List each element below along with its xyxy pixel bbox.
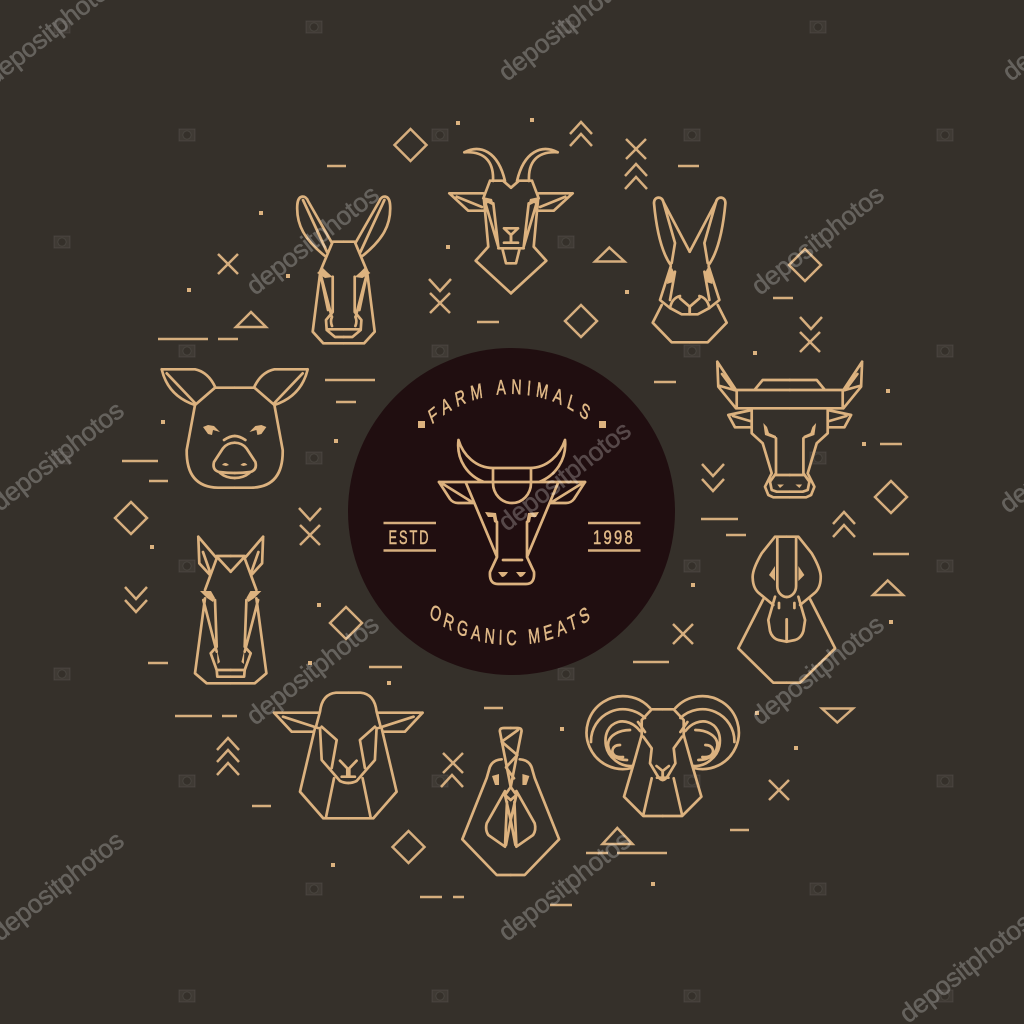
icon: bull head <box>717 362 862 497</box>
watermark text: depositphotos <box>240 609 384 731</box>
icon: sheep head <box>274 693 423 818</box>
year label <box>588 523 640 550</box>
icon: duck head <box>738 537 835 683</box>
watermark text: depositphotos <box>492 415 636 537</box>
watermark text: depositphotos <box>492 825 636 947</box>
badge dots <box>418 421 606 428</box>
decorative crosses <box>218 139 820 800</box>
badge bull head icon <box>439 440 585 584</box>
badge subheading: organic meats: ORGANIC MEATS <box>430 606 590 646</box>
icon: rooster head <box>462 728 559 875</box>
badge disc <box>348 348 675 675</box>
decorative dots <box>150 118 893 886</box>
icon: pig head <box>162 369 308 488</box>
decorative chevrons <box>125 122 855 787</box>
icon: donkey head <box>297 197 390 343</box>
icon: goat head <box>449 149 573 293</box>
badge heading: farm animals: FARM ANIMALS <box>428 379 590 424</box>
icon: horse head <box>195 537 266 683</box>
icon: rabbit head <box>653 198 727 342</box>
decorative triangles <box>236 248 903 844</box>
central badge <box>348 348 675 675</box>
year label: 1998 <box>593 527 635 549</box>
icon: ram head <box>587 696 739 816</box>
watermark text: depositphotos <box>745 609 889 731</box>
watermark text: depositphotos <box>745 179 889 301</box>
watermark text: depositphotos <box>240 179 384 301</box>
estd label <box>384 523 436 550</box>
decorative dashes <box>122 166 909 905</box>
estd label: ESTD <box>388 527 430 549</box>
decorative diamonds <box>115 129 907 863</box>
